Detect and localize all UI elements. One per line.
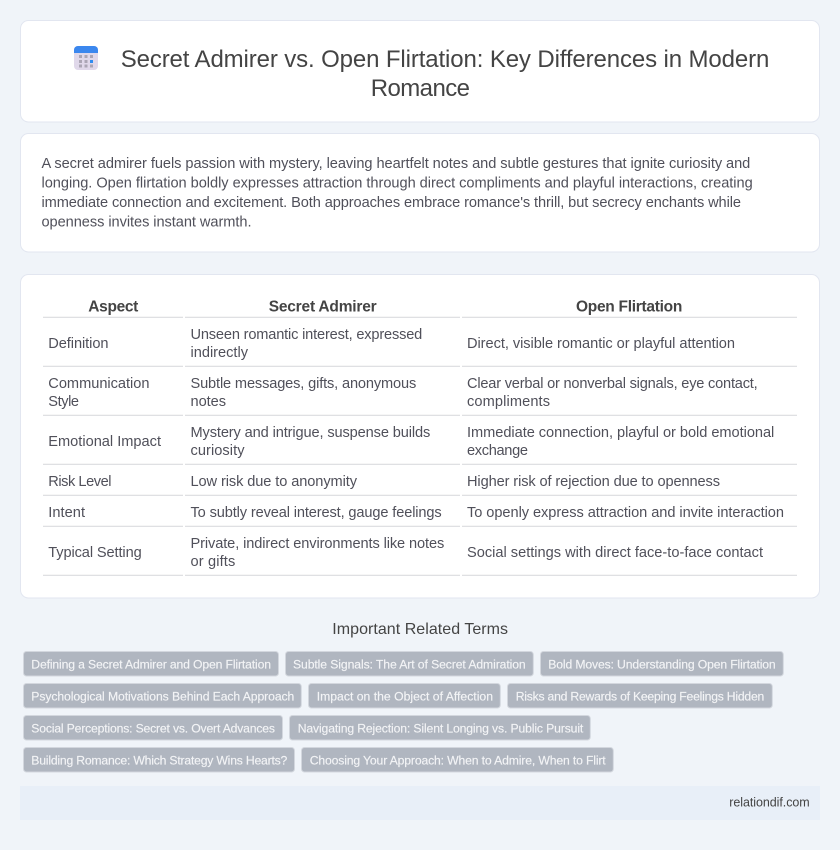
row: emotional impact: Immediate connection, playful or bold emotional xyxy=(467,425,774,441)
related term tags: Social Perceptions: Secret vs. Overt Advances xyxy=(31,722,275,736)
title xyxy=(121,46,769,102)
row: emotional impact xyxy=(48,425,774,459)
table header: Secret Admirer xyxy=(269,299,377,316)
row: risk level: Risk Level xyxy=(48,474,112,490)
row: definition: indirectly xyxy=(190,345,249,361)
row: communication style: Communication xyxy=(48,376,149,392)
row: definition xyxy=(48,327,735,361)
row: definition: Direct, visible romantic or playful attention xyxy=(467,336,735,352)
related term tags: Psychological Motivations Behind Each Approach xyxy=(31,690,294,704)
title: Secret Admirer vs. Open Flirtation: Key Differences in Modern xyxy=(121,46,769,73)
panel: title card xyxy=(20,20,820,122)
table header xyxy=(88,299,682,316)
summary text: immediate connection and excitement. Both approaches embrace romance's thrill, but secrecy enchants while xyxy=(42,195,741,211)
footer xyxy=(20,786,820,820)
summary text xyxy=(42,156,753,230)
row: communication style: notes xyxy=(190,394,226,410)
row: typical setting: Private, indirect environments like notes xyxy=(190,536,444,552)
related term tags: Defining a Secret Admirer and Open Flirtation xyxy=(31,658,271,672)
row: typical setting: or gifts xyxy=(190,554,235,570)
row: emotional impact: Mystery and intrigue, suspense builds xyxy=(190,425,430,441)
row: communication style: compliments xyxy=(467,394,550,410)
row: intent: To subtly reveal interest, gauge feelings xyxy=(190,505,442,521)
row: emotional impact: curiosity xyxy=(190,443,245,459)
related term tags: Building Romance: Which Strategy Wins Hearts? xyxy=(31,754,288,768)
row: communication style: Clear verbal or nonverbal signals, eye contact, xyxy=(467,376,758,392)
row: communication style: Subtle messages, gifts, anonymous xyxy=(190,376,416,392)
related term tags: Risks and Rewards of Keeping Feelings Hidden xyxy=(516,690,764,704)
row: typical setting xyxy=(48,536,763,570)
related term tags: Impact on the Object of Affection xyxy=(317,690,493,704)
related term tags: Bold Moves: Understanding Open Flirtation xyxy=(548,658,776,672)
summary text: longing. Open flirtation boldly expresses attraction through direct compliments and playful interactions, creating xyxy=(42,176,753,192)
table header: Aspect xyxy=(88,299,138,316)
row: risk level: Higher risk of rejection due to openness xyxy=(467,474,720,490)
row: intent: Intent xyxy=(48,505,85,521)
row: intent: To openly express attraction and invite interaction xyxy=(467,505,784,521)
summary text: A secret admirer fuels passion with mystery, leaving heartfelt notes and subtle gestures that ignite curiosity and xyxy=(42,156,750,172)
footer: relationdif.com xyxy=(729,796,810,810)
table header: Open Flirtation xyxy=(576,299,682,316)
row: typical setting: Social settings with direct face-to-face contact xyxy=(467,545,763,561)
row: communication style: Style xyxy=(48,394,79,410)
summary text: openness invites instant warmth. xyxy=(42,214,252,230)
panel: summary xyxy=(20,134,820,252)
related term tags: Subtle Signals: The Art of Secret Admiration xyxy=(293,658,526,672)
related term tags: Navigating Rejection: Silent Longing vs. Public Pursuit xyxy=(298,722,584,736)
heading: important related terms: Important Related Terms xyxy=(332,621,508,638)
row: definition: Unseen romantic interest, expressed xyxy=(190,327,422,343)
row: emotional impact: exchange xyxy=(467,443,528,459)
row: communication style xyxy=(48,376,758,410)
row: risk level xyxy=(48,474,720,490)
related term tags xyxy=(24,652,783,772)
title: Romance xyxy=(371,75,470,102)
row: definition: Definition xyxy=(48,336,108,352)
icon: calendar xyxy=(74,46,98,70)
row: risk level: Low risk due to anonymity xyxy=(190,474,358,490)
row: emotional impact: Emotional Impact xyxy=(48,434,161,450)
panel: comparison table xyxy=(20,274,820,598)
related term tags: Choosing Your Approach: When to Admire, When to Flirt xyxy=(310,754,606,768)
row: typical setting: Typical Setting xyxy=(48,545,142,561)
row: intent xyxy=(48,505,784,521)
